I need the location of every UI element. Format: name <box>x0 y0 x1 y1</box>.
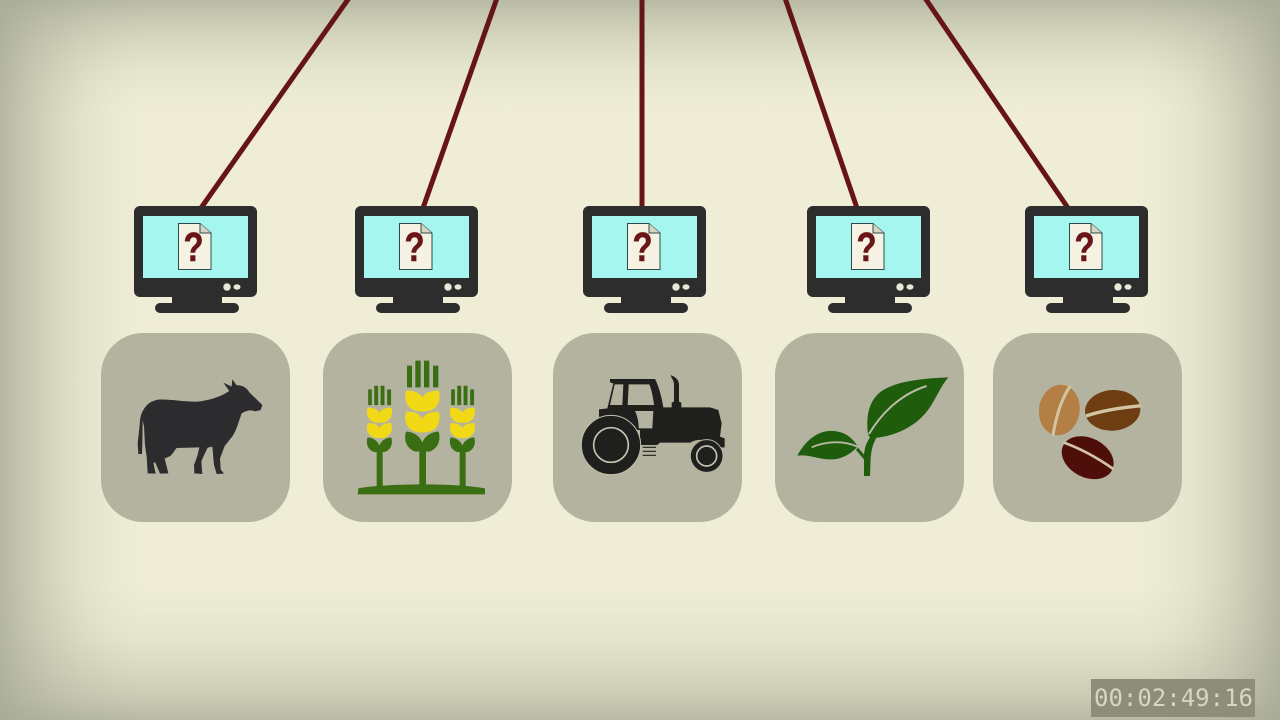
icon: wheat plants <box>358 361 485 494</box>
panel: plants tile <box>775 333 964 522</box>
icon: monitor 3 with unknown document: ? <box>632 223 653 270</box>
panel: crops tile <box>323 333 512 522</box>
icon: cow <box>138 379 262 474</box>
icon: monitor 5 with unknown document: ? <box>1074 223 1095 270</box>
icon: monitor 5 with unknown document <box>1025 206 1148 313</box>
connection lines from top to monitors <box>201 0 1068 208</box>
icon: monitor 1 with unknown document: ? <box>183 223 204 270</box>
panel: machinery tile <box>553 333 742 522</box>
icon: monitor 4 with unknown document: ? <box>856 223 877 270</box>
timecode badge: 00:02:49:16 <box>1094 684 1253 712</box>
icon: green leaf sprout <box>797 377 948 476</box>
panel: cattle tile <box>101 333 290 522</box>
icon: coffee beans <box>1036 382 1142 488</box>
panel: coffee tile <box>993 333 1182 522</box>
icon: tractor <box>581 375 725 475</box>
icon: monitor 4 with unknown document <box>807 206 930 313</box>
icon: monitor 2 with unknown document <box>355 206 478 313</box>
icon: monitor 1 with unknown document <box>134 206 257 313</box>
icon: monitor 3 with unknown document <box>583 206 706 313</box>
icon: monitor 2 with unknown document: ? <box>404 223 425 270</box>
